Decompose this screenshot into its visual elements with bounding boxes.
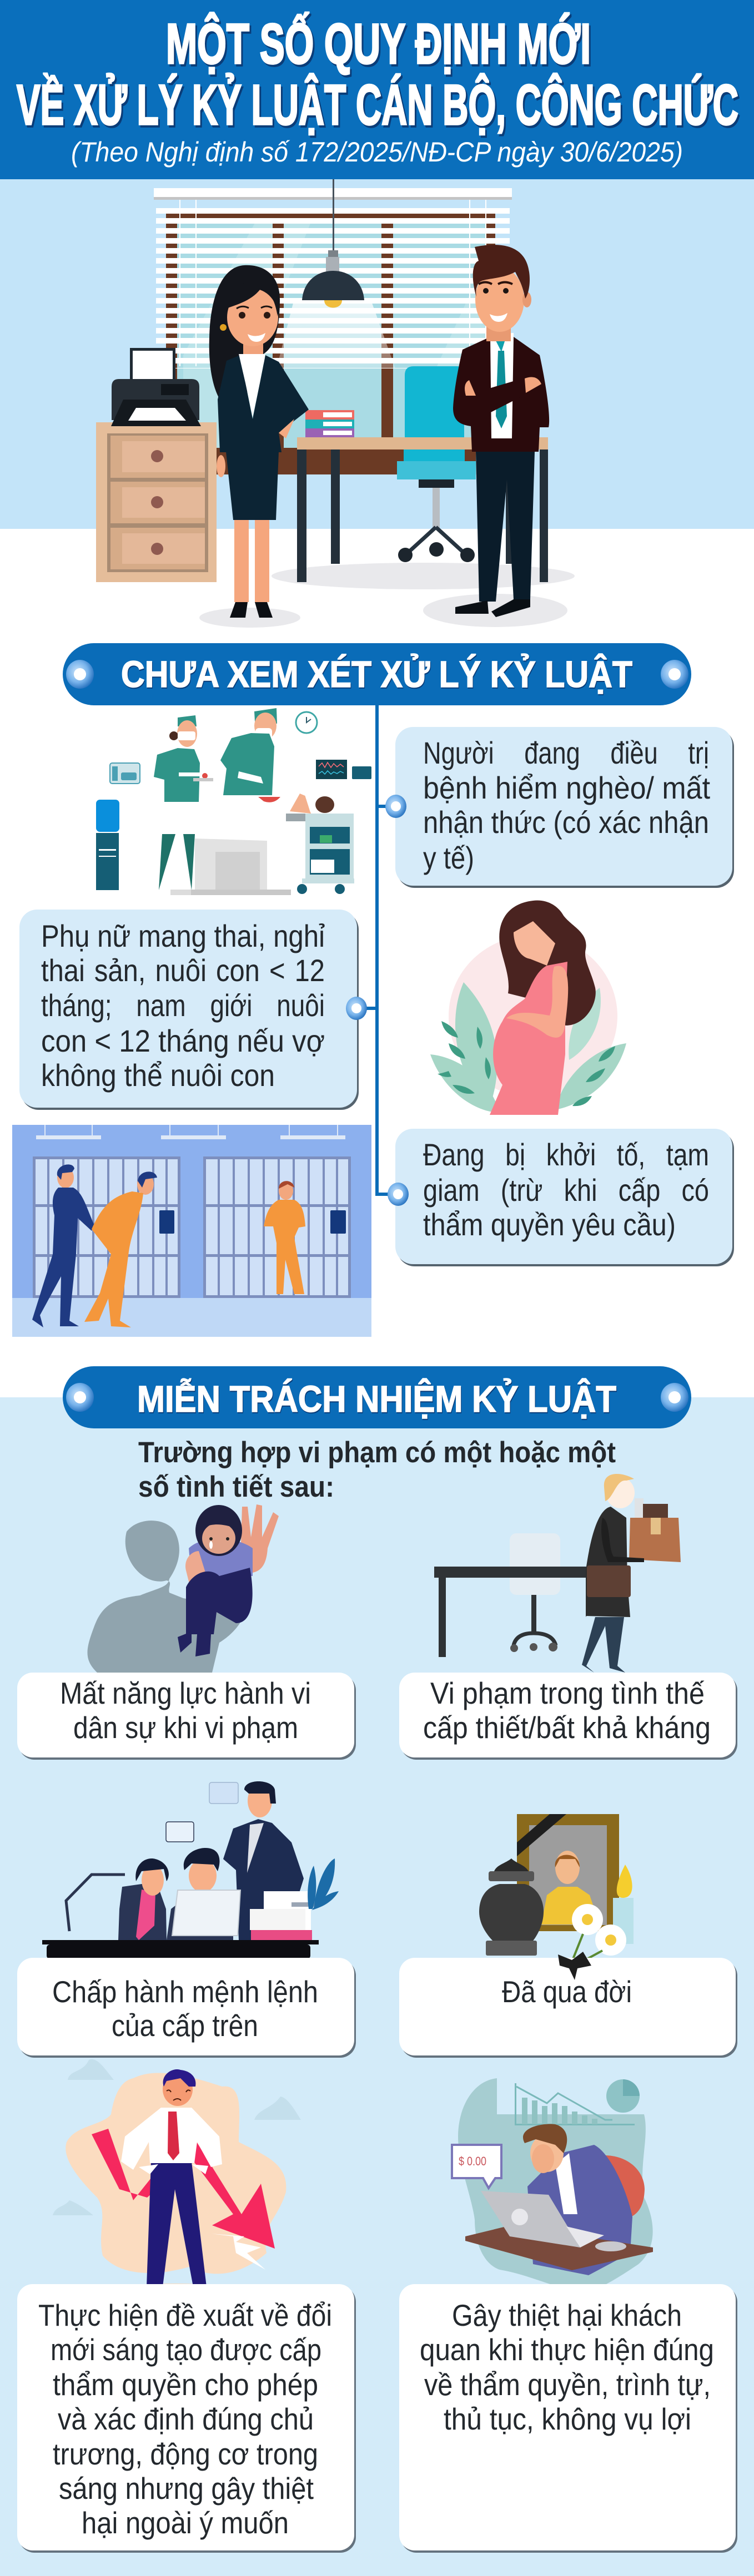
deceased portrait <box>541 1851 600 1925</box>
floor shadow <box>122 2284 229 2298</box>
falling arrow <box>92 2129 275 2249</box>
arm <box>601 1518 644 1562</box>
candle <box>613 1865 634 1944</box>
card: tình thế cấp thiết <box>399 1673 737 1760</box>
laptop <box>172 1890 240 1936</box>
clouds <box>53 2059 301 2215</box>
nurse <box>154 715 213 890</box>
plant <box>308 1858 339 1910</box>
guard <box>32 1164 94 1327</box>
card: gây thiệt hại khách quan: Gây thiệt hại khách <box>452 2298 682 2332</box>
escorted prisoner <box>84 1171 157 1327</box>
boss <box>223 1781 304 1940</box>
text box: đang bị khởi tố: thẩm quyền yêu cầu) <box>423 1207 676 1242</box>
text box: đang bị khởi tố <box>395 1129 734 1266</box>
shoes <box>143 2285 211 2294</box>
girl feet <box>178 1632 211 1656</box>
impact burst <box>211 2234 265 2270</box>
legs <box>582 1617 625 1673</box>
flowers <box>566 1904 626 1976</box>
prisoner in cell <box>264 1181 305 1294</box>
portrait frame <box>517 1814 619 1931</box>
illustration: office team and boss <box>42 1781 339 1959</box>
section heading text: CHƯA XEM XÉT XỬ LÝ KỶ LUẬT <box>121 654 632 695</box>
illustration: frightened girl and shadow <box>88 1504 279 1673</box>
cell 1 <box>33 1156 180 1298</box>
illustration: office scene <box>96 179 575 628</box>
intro text: Trường hợp vi phạm có một hoặc một <box>138 1436 616 1469</box>
hair <box>499 901 596 1026</box>
urn <box>479 1858 544 1956</box>
timeline connector <box>355 705 398 1196</box>
stack of folders <box>305 410 354 437</box>
raised hand <box>240 1504 279 1573</box>
card: tình thế cấp thiết: Vi phạm trong tình thế <box>430 1676 705 1710</box>
price bubble: $ 0.00 <box>459 2154 486 2168</box>
price bubble <box>452 2145 501 2188</box>
illustration: stressed businessman at laptop <box>452 2078 653 2292</box>
speech bubbles <box>166 1782 238 1842</box>
pie chart <box>606 2079 640 2113</box>
intercom panel <box>110 763 140 784</box>
card: đổi mới sáng tạo: Thực hiện đề xuất về đổi <box>38 2298 332 2332</box>
laptop <box>481 2191 604 2247</box>
card: gây thiệt hại khách quan: về thẩm quyền, trình tự, <box>424 2367 711 2402</box>
chair back <box>606 2155 645 2220</box>
card: gây thiệt hại khách quan <box>399 2284 737 2553</box>
filing cabinet <box>96 422 217 582</box>
head <box>604 1474 635 1508</box>
text box: phụ nữ mang thai: Phụ nữ mang thai, nghỉ <box>41 918 325 953</box>
card: gây thiệt hại khách quan: quan khi thực hiện đúng <box>420 2332 714 2367</box>
intro text: số tình tiết sau: <box>138 1471 334 1503</box>
woman colleague <box>118 1858 169 1940</box>
light cone <box>277 303 395 368</box>
card: đổi mới sáng tạo: trương, động cơ trong <box>53 2437 318 2471</box>
section header: chưa xem xét xử lý kỷ luật <box>63 643 691 705</box>
surgeon <box>220 708 280 802</box>
panel: title header <box>0 0 754 179</box>
icon: right dot <box>661 660 688 689</box>
text box: phụ nữ mang thai: không thể nuôi con <box>41 1058 275 1093</box>
card: mất năng lực <box>17 1673 356 1760</box>
desk <box>465 2225 653 2270</box>
cell locks <box>159 1210 346 1234</box>
text box: điều trị bệnh hiểm nghèo: y tế) <box>423 840 474 875</box>
shirt <box>121 2108 222 2170</box>
card: chấp hành mệnh lệnh: Chấp hành mệnh lệnh <box>52 1974 318 2009</box>
text box: phụ nữ mang thai: thai sản, nuôi con < 12 <box>41 953 325 988</box>
intro text <box>138 1436 616 1503</box>
card: gây thiệt hại khách quan: thủ tục, không vụ lợi <box>444 2402 691 2436</box>
mouse <box>595 2241 626 2251</box>
girl head <box>195 1505 242 1556</box>
wall clock <box>296 712 317 733</box>
tie <box>168 2112 179 2160</box>
icon: connector dot 1 <box>385 795 406 818</box>
operating table <box>170 814 348 895</box>
card: chấp hành mệnh lệnh <box>17 1958 356 2058</box>
man in suit <box>453 245 549 617</box>
text box: điều trị bệnh hiểm nghèo <box>395 727 734 888</box>
window <box>166 214 495 474</box>
head <box>163 2069 196 2106</box>
desk <box>297 437 548 582</box>
card: chấp hành mệnh lệnh: của cấp trên <box>112 2008 258 2043</box>
girl body <box>189 1539 253 1582</box>
text box: phụ nữ mang thai: tháng; nam giới nuôi <box>41 988 325 1023</box>
card: đổi mới sáng tạo: mới sáng tạo được cấp <box>51 2332 321 2367</box>
shadow figure <box>88 1521 245 1673</box>
shoulder bag <box>587 1565 631 1597</box>
illustration: man with empty pockets <box>53 2059 301 2298</box>
medical cart and monitors <box>297 760 371 894</box>
mourning ribbon <box>517 1814 566 1856</box>
card: mất năng lực: Mất năng lực hành vi <box>60 1676 311 1710</box>
head and hands <box>523 2124 567 2173</box>
face <box>514 921 555 966</box>
ground shadows <box>199 563 575 628</box>
icon: connector dot 3 <box>388 1183 409 1206</box>
icon: left dot <box>66 660 94 689</box>
text box: điều trị bệnh hiểm nghèo: nhận thức (có xác nhận <box>423 805 709 840</box>
illustration: memorial portrait <box>479 1814 634 1976</box>
leaves <box>430 982 626 1113</box>
shirt <box>555 2153 577 2214</box>
card: đổi mới sáng tạo: sáng nhưng gây thiệt <box>59 2471 314 2506</box>
desk lamp <box>66 1875 125 1931</box>
office chair <box>397 366 476 562</box>
man <box>586 1507 630 1617</box>
card: tình thế cấp thiết: cấp thiết/bất khả kháng <box>423 1710 711 1745</box>
subtitle: (Theo Nghị định số 172/2025/NĐ-CP ngày 30/6/2025) <box>71 137 683 168</box>
desk <box>434 1567 590 1657</box>
girl arm <box>185 1551 222 1607</box>
woman in suit <box>209 265 309 618</box>
ceiling lamp <box>302 179 364 307</box>
suit jacket <box>527 2145 632 2275</box>
desk <box>42 1940 319 1959</box>
peach blob <box>66 2073 286 2274</box>
water cooler <box>96 800 119 890</box>
printer <box>111 348 201 426</box>
arm <box>506 966 568 1038</box>
trousers <box>147 2161 207 2287</box>
teal blob <box>458 2078 653 2292</box>
card: mất năng lực: dân sự khi vi phạm <box>73 1710 298 1745</box>
card: đổi mới sáng tạo: thẩm quyền cho phép <box>53 2367 318 2402</box>
cell 2 <box>203 1156 351 1298</box>
card: đổi mới sáng tạo <box>17 2284 356 2553</box>
window blinds <box>154 188 512 368</box>
card: đổi mới sáng tạo: và xác định đúng chủ <box>58 2402 314 2436</box>
patient <box>290 786 334 814</box>
black bow over card <box>558 1952 591 1980</box>
illustration: operating room <box>96 708 371 895</box>
text box: điều trị bệnh hiểm nghèo: bệnh hiểm nghèo/ mất <box>423 770 710 805</box>
dress <box>490 962 567 1115</box>
section header: miễn trách nhiệm kỷ luật <box>63 1366 691 1428</box>
chair <box>510 1533 560 1652</box>
cardboard box <box>629 1498 681 1562</box>
paper stacks <box>250 1891 315 1940</box>
text box: phụ nữ mang thai: con < 12 tháng nếu vợ <box>41 1023 325 1058</box>
girl legs <box>186 1568 253 1634</box>
card: đổi mới sáng tạo: hại ngoài ý muốn <box>82 2506 289 2540</box>
ceiling lights <box>36 1125 345 1139</box>
illustration: pregnant woman <box>430 901 626 1115</box>
icon: connector dot 2 <box>346 997 367 1020</box>
icon: right dot <box>661 1383 688 1412</box>
card: đã qua đời <box>399 1958 737 2058</box>
icon: left dot <box>66 1383 94 1412</box>
section heading text: MIỄN TRÁCH NHIỆM KỶ LUẬT <box>137 1378 616 1420</box>
text box: phụ nữ mang thai <box>19 910 359 1110</box>
man colleague <box>167 1848 233 1940</box>
pocket linings <box>139 2164 208 2174</box>
line chart <box>515 2083 635 2125</box>
illustration: prison cells <box>12 1125 371 1337</box>
illustration: man leaving with box <box>434 1474 681 1673</box>
card: đã qua đời: Đã qua đời <box>502 1974 632 2009</box>
